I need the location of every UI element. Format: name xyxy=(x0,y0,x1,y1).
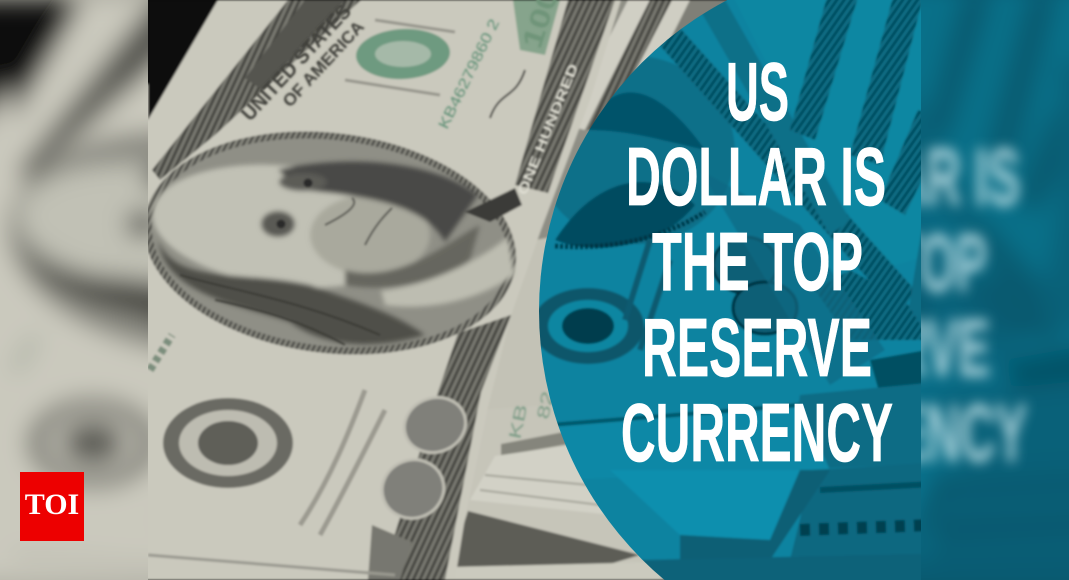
logo: TOI: TOI xyxy=(25,488,79,521)
teal circle overlay xyxy=(539,0,921,580)
bill printed text: 82 xyxy=(533,389,558,421)
headline xyxy=(621,45,893,479)
headline: RESERVE xyxy=(642,301,872,394)
logo: TOI xyxy=(20,472,84,541)
bill printed text: OF AMERICA xyxy=(279,17,368,111)
panel: blurred right background xyxy=(921,0,1069,580)
bill printed text: ONE HUNDRED xyxy=(514,61,581,197)
headline: US xyxy=(726,45,789,138)
headline: DOLLAR IS xyxy=(626,130,886,223)
panel: blurred left background xyxy=(0,0,148,580)
bill printed text: KB xyxy=(505,403,531,441)
blurred headline echo xyxy=(921,139,1033,470)
bill printed text: KB46279860 2 xyxy=(435,16,503,132)
headline: THE TOP xyxy=(652,215,863,308)
bill printed text xyxy=(237,0,581,441)
panel: central banknote photo xyxy=(148,0,921,580)
